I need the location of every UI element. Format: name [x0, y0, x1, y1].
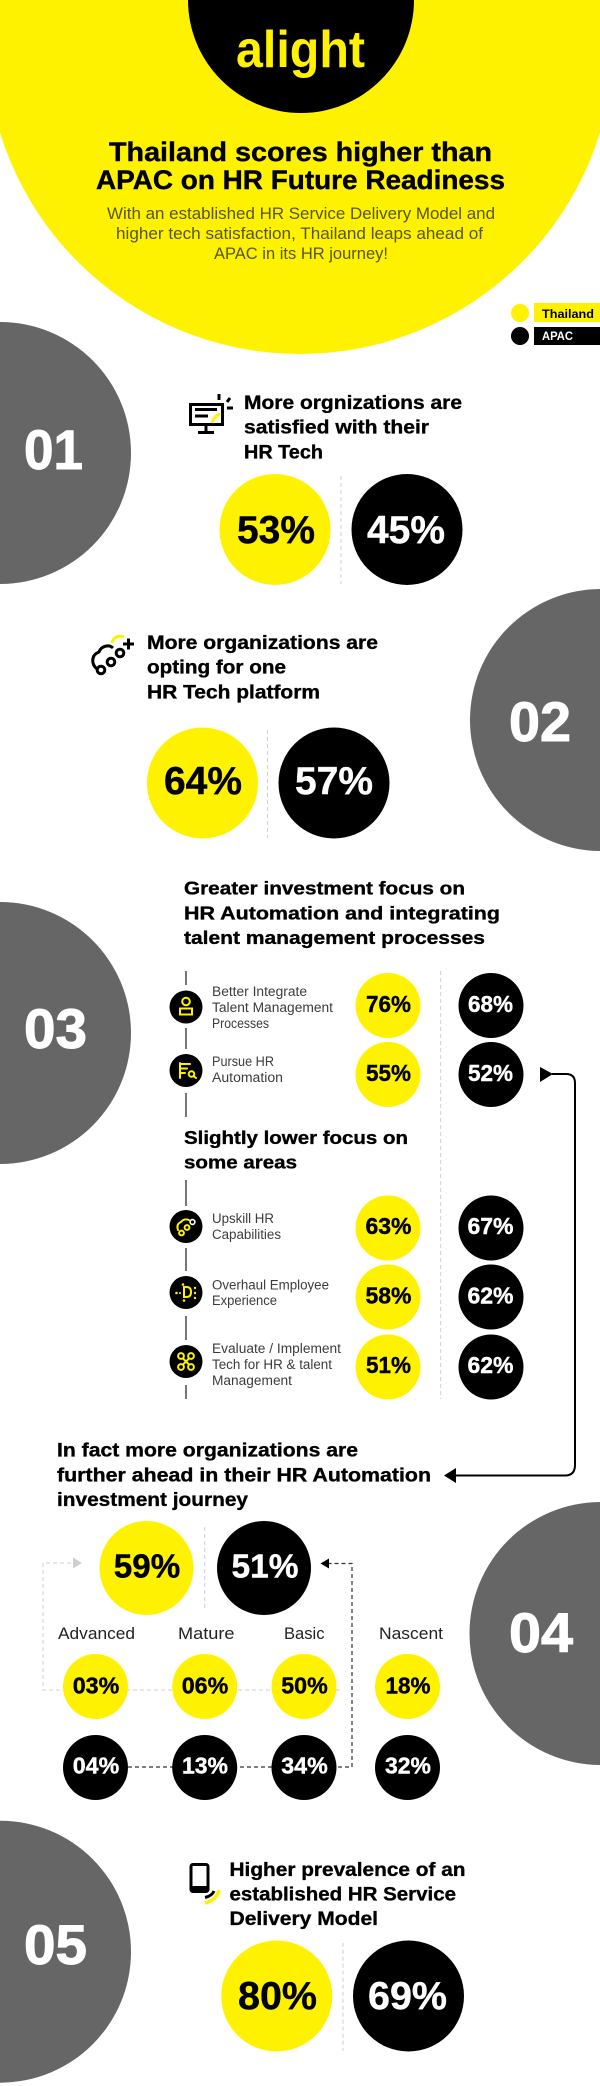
stat: Thailand 53%: 53%: [237, 509, 315, 552]
stat: APAC 67%: [458, 1196, 524, 1260]
icon: employee experience: [170, 1276, 202, 1309]
stat: APAC 69%: [353, 1940, 464, 2052]
label: evaluate implement: Management: [212, 1373, 292, 1388]
label: overhaul employee: Overhaul Employee: [212, 1278, 329, 1292]
stat: basic 34%: [272, 1735, 336, 1800]
connector: Thailand dashed arrow: [43, 1558, 340, 1690]
stat: mature 06%: [172, 1654, 237, 1719]
label: evaluate implement: Evaluate / Implement: [212, 1341, 341, 1356]
stat: Thailand 63%: 63%: [366, 1213, 412, 1239]
icon: person: [170, 990, 202, 1024]
stage labels: Nascent: [379, 1624, 443, 1643]
stat: Thailand 53%: [220, 474, 330, 585]
stat: Thailand 64%: [147, 728, 258, 838]
stat: Thailand 58%: 58%: [366, 1282, 412, 1308]
stat: Thailand 51%: [356, 1334, 420, 1400]
stat: Thailand 58%: [356, 1264, 420, 1330]
row: upskill HR capabilities: [170, 1196, 524, 1260]
section 05 number: [0, 1821, 131, 2083]
heading: HR tech satisfaction: More orgnizations are: [244, 392, 462, 414]
stat: mature 13%: [172, 1735, 237, 1800]
subtitle: With an established HR Service Delivery Model and: [107, 205, 495, 223]
stat: Thailand 59%: 59%: [114, 1548, 180, 1585]
stat: Thailand 64%: 64%: [164, 760, 242, 803]
stat: Thailand 76%: [356, 973, 420, 1038]
connector: APAC dashed arrow: [128, 1558, 352, 1767]
icon: form search: [170, 1054, 202, 1087]
heading: greater investment focus: Greater investment focus on: [184, 878, 465, 898]
stat: mature 13%: 13%: [182, 1752, 228, 1778]
stat: APAC 69%: 69%: [368, 1975, 447, 2018]
legend: APAC: [542, 329, 573, 343]
heading: slightly lower focus: Slightly lower focus on: [184, 1127, 408, 1148]
stat: Thailand 63%: [356, 1196, 420, 1260]
heading: further ahead in automation: In fact more organizations are: [57, 1440, 358, 1462]
stat: Thailand 59%: [100, 1521, 194, 1615]
label: evaluate implement: [212, 1341, 341, 1388]
title: Thailand scores higher than: [109, 137, 492, 167]
title: [96, 137, 505, 195]
section 03 number: 03: [24, 997, 87, 1060]
stat: basic 34%: 34%: [281, 1752, 328, 1778]
logo badge: alight: [236, 21, 365, 79]
stat: Thailand 51%: 51%: [366, 1352, 411, 1378]
heading: HR service delivery model: Higher prevalence of an: [230, 1859, 466, 1881]
stat: nascent 32%: 32%: [385, 1752, 431, 1778]
label: overhaul employee: [212, 1278, 329, 1308]
row: evaluate implement tech: [170, 1334, 524, 1400]
icon: linked circles: [93, 636, 134, 674]
icon: phone: [191, 1864, 219, 1903]
stat: nascent 18%: 18%: [386, 1672, 431, 1698]
stat: Thailand 55%: 55%: [366, 1060, 411, 1086]
logo badge: [188, 0, 414, 113]
heading: one HR tech platform: [147, 632, 378, 704]
stat: nascent 32%: [375, 1735, 440, 1800]
heading: greater investment focus: [184, 878, 500, 948]
label: better integrate: Processes: [212, 1016, 269, 1031]
heading: further ahead in automation: further ahead in their HR Automation: [57, 1464, 431, 1486]
icon: monitor: [190, 394, 233, 432]
section 03 number: [0, 902, 131, 1164]
stat: advanced 03%: [63, 1654, 128, 1719]
stat: mature 06%: 06%: [182, 1672, 228, 1698]
section 02 number: [470, 589, 600, 851]
stat: APAC 62%: [458, 1264, 524, 1330]
stat: APAC 51%: [217, 1521, 311, 1615]
Thailand stage stats: [63, 1654, 440, 1719]
stat: APAC 68%: [458, 973, 524, 1038]
label: upskill HR: [212, 1211, 281, 1242]
stat: basic 50%: [272, 1654, 336, 1719]
heading: one HR tech platform: More organizations are: [147, 632, 378, 654]
label: evaluate implement: Tech for HR & talent: [212, 1357, 332, 1372]
stat: nascent 18%: [375, 1654, 440, 1719]
subtitle: higher tech satisfaction, Thailand leaps ahead of: [116, 225, 483, 243]
label: better integrate: Better Integrate: [212, 984, 307, 999]
stat: advanced 04%: [63, 1735, 128, 1800]
stage labels: Mature: [178, 1624, 234, 1643]
row: pursue HR automation: [170, 1042, 524, 1107]
heading: further ahead in automation: [57, 1440, 431, 1511]
heading: HR service delivery model: established HR Service: [230, 1883, 456, 1905]
subtitle: [107, 205, 495, 263]
heading: greater investment focus: talent management processes: [184, 927, 485, 948]
arrow: from 52% to automation journey heading: [444, 1067, 575, 1483]
title: APAC on HR Future Readiness: [96, 165, 505, 195]
stage labels: [58, 1624, 443, 1643]
stat: APAC 52%: 52%: [468, 1060, 513, 1086]
stat: APAC 68%: 68%: [468, 991, 513, 1017]
stat: APAC 57%: 57%: [295, 760, 373, 803]
label: overhaul employee: Experience: [212, 1293, 277, 1308]
heading: greater investment focus: HR Automation and integrating: [184, 902, 500, 924]
stat: Thailand 80%: [221, 1940, 332, 2052]
stat: APAC 52%: [458, 1042, 524, 1107]
icon: upskill circles: [170, 1210, 202, 1243]
row: overhaul employee experience: [170, 1264, 524, 1330]
label: pursue HR automation: Automation: [212, 1070, 283, 1085]
section 04 number: 04: [509, 1601, 573, 1664]
heading: HR service delivery model: Delivery Model: [230, 1908, 378, 1930]
row: better integrate talent management: [170, 973, 524, 1038]
stat: Thailand 76%: 76%: [366, 991, 411, 1017]
legend: Thailand: [542, 307, 594, 321]
APAC stage stats: [63, 1735, 440, 1800]
label: upskill HR: Upskill HR: [212, 1211, 274, 1226]
legend: [511, 303, 600, 345]
heading: HR tech satisfaction: satisfied with their: [244, 416, 429, 438]
label: pursue HR automation: Pursue HR: [212, 1054, 274, 1069]
section 01 number: [0, 322, 131, 584]
stat: Thailand 80%: 80%: [238, 1975, 317, 2018]
stat: APAC 62%: [458, 1334, 524, 1400]
stat: advanced 04%: 04%: [73, 1752, 119, 1778]
section 01 number: 01: [24, 418, 83, 481]
stat: APAC 62%: 62%: [468, 1282, 514, 1308]
heading: further ahead in automation: investment journey: [57, 1489, 248, 1511]
stat: APAC 57%: [278, 728, 390, 838]
heading: slightly lower focus: [184, 1127, 408, 1172]
header panel: [0, 0, 600, 354]
stat: APAC 45%: [352, 474, 462, 585]
heading: HR tech satisfaction: [244, 392, 462, 464]
stat: APAC 51%: 51%: [232, 1548, 298, 1585]
stat: Thailand 55%: [356, 1042, 420, 1107]
stat: APAC 62%: 62%: [468, 1352, 514, 1378]
stat: APAC 45%: 45%: [367, 509, 445, 552]
stat: APAC 67%: 67%: [468, 1213, 514, 1239]
label: better integrate: Talent Management: [212, 1000, 333, 1015]
section 02 number: 02: [509, 690, 571, 753]
stage labels: Basic: [284, 1624, 325, 1643]
heading: one HR tech platform: HR Tech platform: [147, 682, 320, 704]
stat: advanced 03%: 03%: [73, 1672, 119, 1698]
subtitle: APAC in its HR journey!: [214, 245, 388, 263]
heading: slightly lower focus: some areas: [184, 1152, 297, 1172]
heading: HR service delivery model: [230, 1859, 466, 1930]
heading: HR tech satisfaction: HR Tech: [244, 442, 323, 464]
label: pursue HR automation: [212, 1054, 283, 1085]
icon: network nodes: [170, 1345, 202, 1378]
stat: basic 50%: 50%: [281, 1672, 328, 1698]
section 05 number: 05: [24, 1913, 87, 1976]
heading: one HR tech platform: opting for one: [147, 656, 286, 678]
label: upskill HR: Capabilities: [212, 1227, 281, 1242]
label: better integrate: [212, 984, 333, 1031]
section 04 number: [470, 1502, 600, 1765]
stage labels: Advanced: [58, 1624, 135, 1643]
